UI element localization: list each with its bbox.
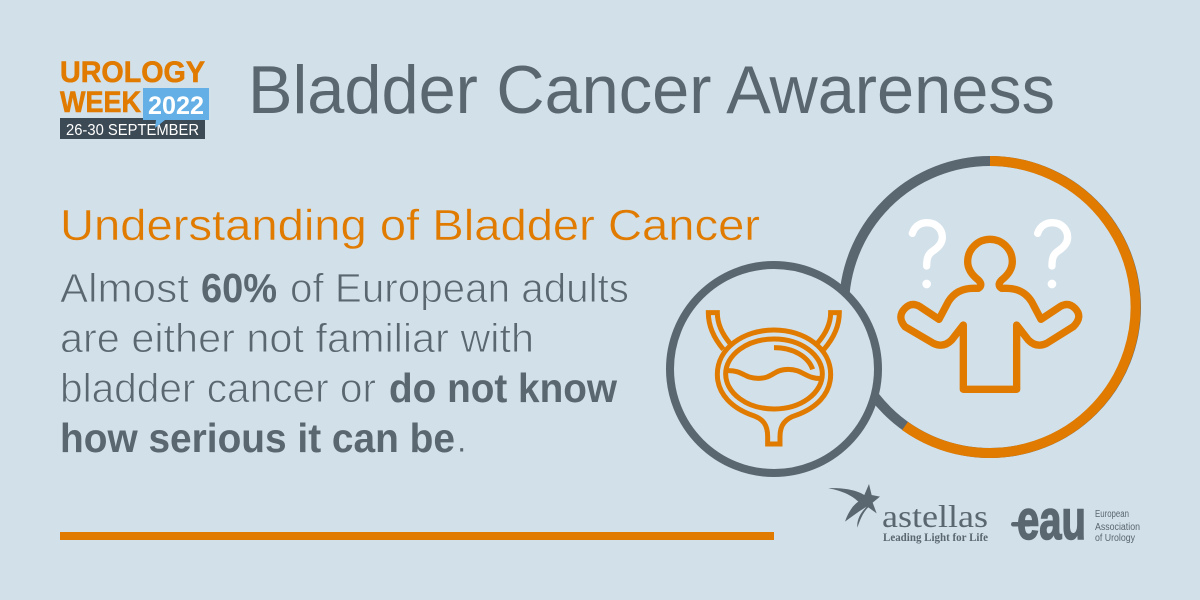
astellas star [828,484,880,528]
orange rule [60,532,774,540]
eau name: European [1095,509,1129,520]
icon: person shrugging [901,239,1079,389]
big donut ring [844,161,1136,453]
body text: are either not familiar with [60,315,534,361]
icon: right question mark [1038,223,1068,288]
logo wordmark: WEEK [60,86,141,119]
eau name [1095,509,1140,544]
body text: how serious it can be [60,415,455,461]
body text [60,265,629,461]
logo: Urology Week 2022 [60,56,209,139]
eau name: Association [1095,522,1140,533]
title: Bladder Cancer Awareness [248,52,1055,128]
body text: of European adults [290,265,629,311]
astellas tagline: Leading Light for Life [883,532,988,544]
eau mark: eau [1017,488,1086,551]
small circle [670,265,878,473]
icon: left question mark [912,223,942,288]
year speech bubble [143,88,209,128]
logo wordmark: UROLOGY [60,56,205,89]
body text: Almost [60,265,190,311]
logo wordmark [60,56,205,119]
body text: . [456,415,467,461]
date bar: 26-30 SEPTEMBER [66,122,199,139]
astellas wordmark: astellas [882,498,988,534]
body text: bladder cancer or [60,365,376,411]
body text: 60% [201,265,277,311]
logo: astellas [828,484,988,544]
body text: do not know [389,365,617,411]
heading: Understanding of Bladder Cancer [60,201,760,250]
icon: bladder [708,313,839,444]
logo: European Association of Urology [1011,488,1140,551]
eau name: of Urology [1095,533,1135,544]
year speech bubble: 2022 [148,92,204,120]
